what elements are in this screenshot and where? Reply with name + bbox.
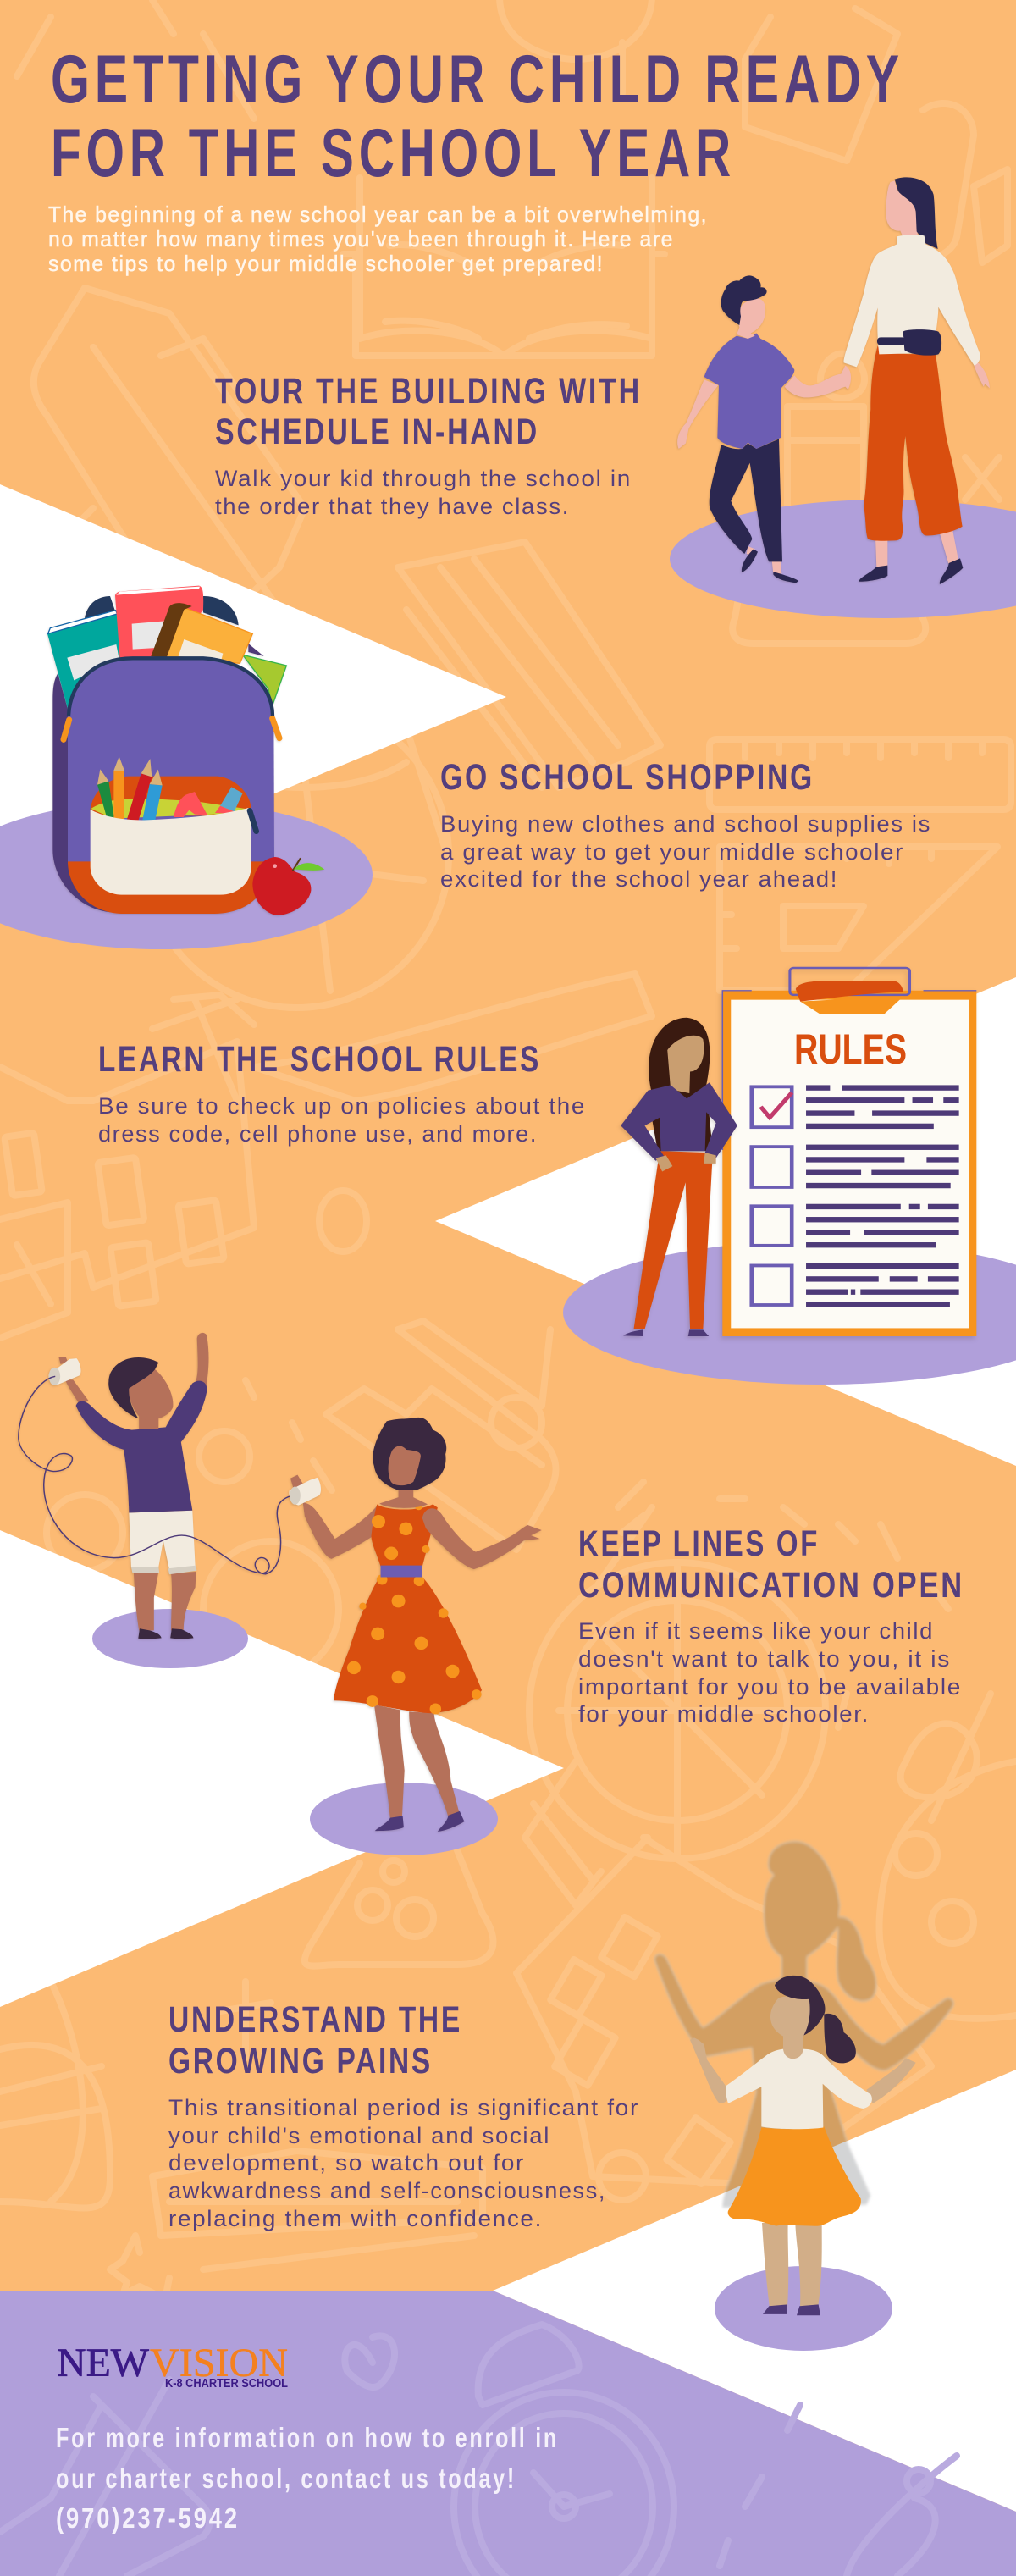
white zig-zag bands <box>0 484 1016 2512</box>
text: growing pains: your child's emotional and social <box>168 2123 550 2148</box>
panel: keep lines of communication open <box>19 1333 964 1832</box>
illustration: woman with hands on hips <box>621 1018 737 1336</box>
heading: tour: SCHEDULE IN-HAND <box>215 412 539 452</box>
footer <box>56 2341 559 2534</box>
panel: tour the building <box>215 177 990 584</box>
text: tour: the order that they have class. <box>215 494 570 519</box>
ground ellipse: woman <box>310 1783 498 1855</box>
logo: New Vision: NEW <box>57 2341 150 2385</box>
heading: tour <box>215 371 642 452</box>
text: communication: doesn't want to talk to you, it is <box>578 1646 951 1672</box>
text: growing pains: This transitional period is significant for <box>168 2095 639 2120</box>
panel: understand the growing pains <box>168 1842 953 2315</box>
heading: shopping: GO SCHOOL SHOPPING <box>440 757 814 798</box>
text: rules: Be sure to check up on policies about the <box>98 1093 586 1119</box>
illustration: clipboard <box>722 968 976 1336</box>
girl <box>690 1976 916 2315</box>
adult shadow <box>654 1842 953 2208</box>
text: communication: for your middle schooler. <box>578 1701 870 1727</box>
text: communication <box>578 1618 962 1727</box>
illustration: woman in polka dot dress <box>289 1418 542 1832</box>
intro text <box>48 202 708 276</box>
heading: tour: TOUR THE BUILDING WITH <box>215 371 642 412</box>
text: communication: important for you to be available <box>578 1674 962 1700</box>
contact text: (970)237-5942 <box>56 2502 240 2534</box>
panel: go school shopping <box>47 586 931 915</box>
text: shopping: excited for the school year ahead! <box>440 866 838 892</box>
text: tour <box>215 466 632 519</box>
son <box>677 275 851 583</box>
text: growing pains: awkwardness and self-consciousness, <box>168 2178 606 2203</box>
footer doodles <box>0 2324 957 2576</box>
intro text: The beginning of a new school year can be a bit overwhelming, <box>48 202 708 227</box>
title: FOR THE SCHOOL YEAR <box>51 115 736 191</box>
ground ellipse: girl <box>715 2266 892 2351</box>
contact text: For more information on how to enroll in <box>56 2422 559 2453</box>
ground ellipse: rules <box>563 1241 1016 1385</box>
ground ellipse: backpack <box>0 800 373 949</box>
heading: growing pains: GROWING PAINS <box>168 2041 433 2081</box>
heading: communication <box>578 1523 964 1606</box>
icon: apple <box>252 857 324 915</box>
heading: rules: LEARN THE SCHOOL RULES <box>98 1039 541 1080</box>
logo: New Vision: VISION <box>150 2341 288 2385</box>
heading: growing pains <box>168 1999 462 2081</box>
illustration: girl with adult shadow <box>654 1842 953 2315</box>
text: growing pains: replacing them with confidence. <box>168 2206 543 2231</box>
text: growing pains <box>168 2095 639 2231</box>
logo: New Vision <box>57 2341 288 2391</box>
text: communication: Even if it seems like your child <box>578 1618 934 1644</box>
text: rules <box>98 1093 586 1147</box>
contact text <box>56 2422 559 2534</box>
string <box>19 1376 295 1574</box>
illustration: parent and son <box>677 177 990 584</box>
illustration: boy with tin can phone <box>19 1333 295 1639</box>
text: shopping <box>440 811 931 892</box>
title <box>51 41 904 191</box>
intro text: some tips to help your middle schooler get prepared! <box>48 251 604 276</box>
text: shopping: a great way to get your middle schooler <box>440 839 904 865</box>
intro text: no matter how many times you've been through it. Here are <box>48 226 674 252</box>
text: shopping: Buying new clothes and school supplies is <box>440 811 931 837</box>
heading: communication: KEEP LINES OF <box>578 1523 820 1564</box>
text: growing pains: development, so watch out for <box>168 2150 525 2175</box>
icon: backpack <box>47 586 324 915</box>
mother <box>844 177 990 584</box>
contact text: our charter school, contact us today! <box>56 2463 516 2494</box>
text: tour: Walk your kid through the school in <box>215 466 632 491</box>
illustration: clipboard: RULES <box>794 1025 907 1073</box>
logo: New Vision: K-8 CHARTER SCHOOL <box>165 2376 288 2391</box>
ground ellipse: parent and son <box>670 500 1016 618</box>
ground ellipse: boy <box>92 1609 248 1668</box>
text: rules: dress code, cell phone use, and more. <box>98 1121 538 1147</box>
lavender footer panel <box>0 2291 1016 2576</box>
panel: learn the school rules <box>98 968 976 1336</box>
heading: growing pains: UNDERSTAND THE <box>168 1999 462 2040</box>
